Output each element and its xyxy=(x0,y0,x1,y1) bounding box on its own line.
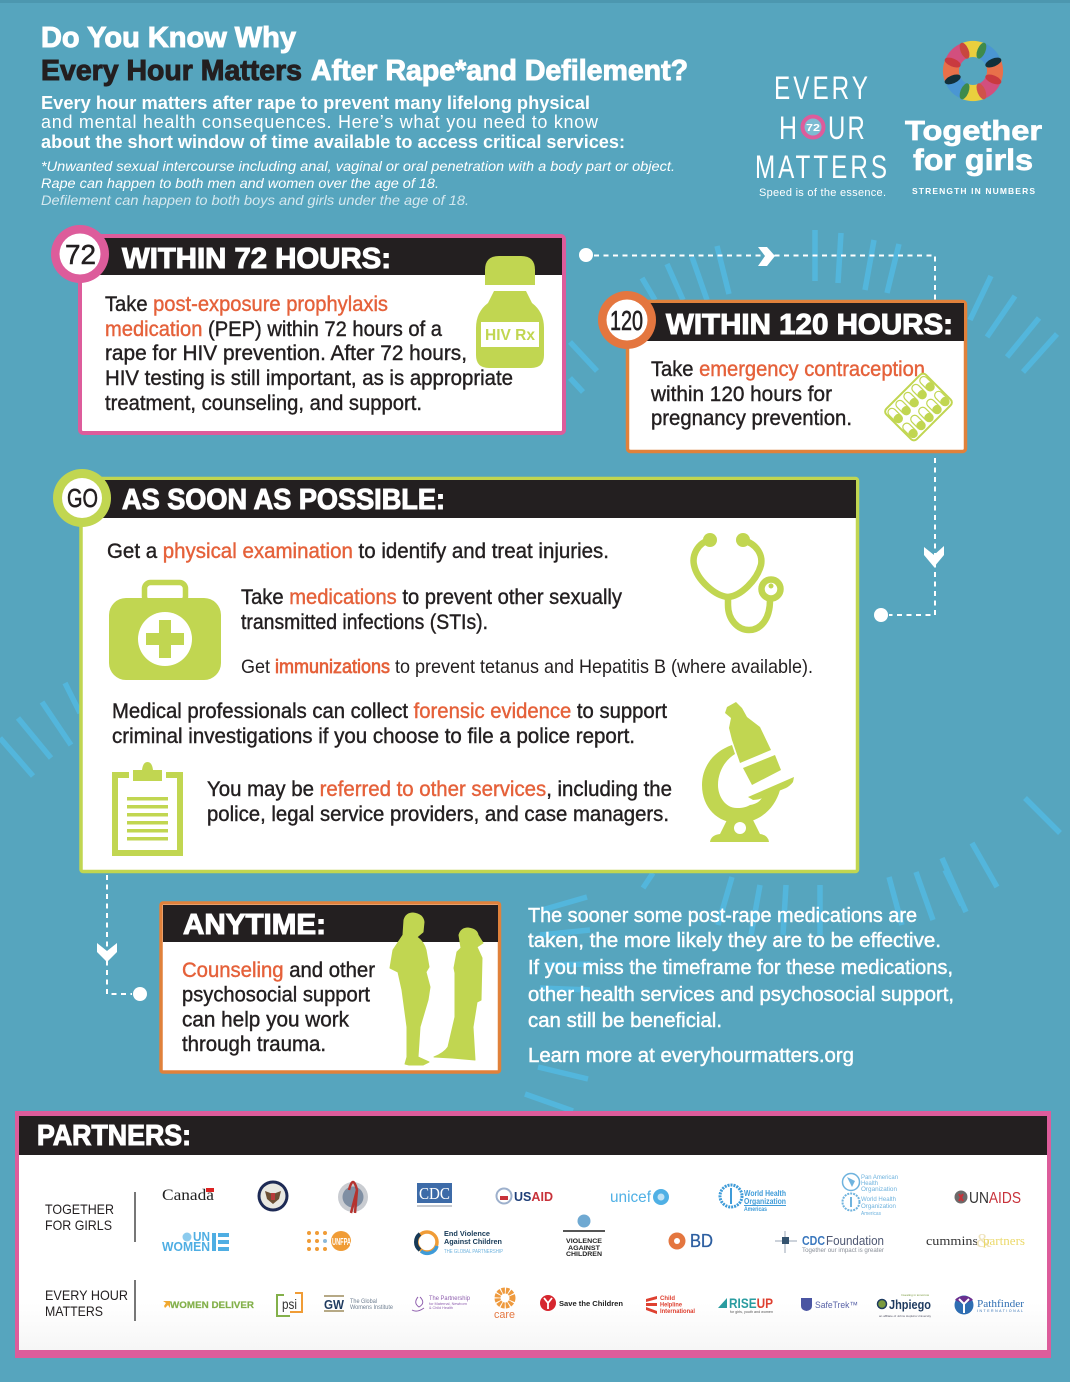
label: together for girls: TOGETHER xyxy=(45,1201,114,1217)
text: forensic evidence: Medical professionals can collect forensic evidence to support xyxy=(112,700,667,723)
footnote definitions xyxy=(41,158,675,208)
panel: as soon as possible xyxy=(53,469,858,872)
text: medications xyxy=(241,586,622,634)
logo: pepfar xyxy=(338,1182,368,1213)
logo: together for girls xyxy=(905,41,1042,196)
logo: usaid: USAID xyxy=(514,1189,553,1204)
logo: pathfinder international xyxy=(954,1296,1025,1314)
logo: pan american health organization: Organization xyxy=(861,1204,896,1210)
logo: every hour matters xyxy=(755,70,890,199)
logo: cdc foundation: CDC xyxy=(802,1234,825,1248)
body text: within 120 hours for xyxy=(650,383,832,406)
logo: child helpline international xyxy=(646,1295,695,1315)
body text: pregnancy prevention. xyxy=(651,407,852,430)
logo: unfpa: UNFPA xyxy=(332,1237,351,1248)
body text: rape for HIV prevention. After 72 hours, xyxy=(105,342,467,365)
logo: end violence against children: Against Children xyxy=(444,1237,502,1246)
text: sooner is better: The sooner some post-rape medications are xyxy=(528,905,917,927)
logo: end violence against children: End Violence xyxy=(444,1229,490,1238)
icon: first aid kit xyxy=(109,582,221,680)
logo: canada: Canada xyxy=(162,1187,214,1204)
logo: unaids: UNAIDS xyxy=(969,1190,1021,1207)
text: sooner is better: Learn more at everyhourmatters.org xyxy=(528,1045,854,1067)
logo: jhpiego: Jhpiego xyxy=(889,1297,931,1312)
icon: microscope xyxy=(702,702,794,842)
logo: every hour matters: MATTERS xyxy=(755,149,890,185)
logo: world health organization americas: Organization xyxy=(744,1197,786,1206)
heading: AS SOON AS POSSIBLE: xyxy=(122,484,445,516)
logo: rise up xyxy=(718,1295,773,1314)
logo: pan american health organization xyxy=(842,1174,898,1217)
logo: save the children: Save the Children xyxy=(559,1299,623,1308)
body text xyxy=(105,293,513,415)
footnote definitions: *Unwanted sexual intercourse including anal, vaginal or oral penetration with a body part or object. xyxy=(41,158,675,174)
logo: care: care xyxy=(494,1309,515,1321)
logo: safetrek xyxy=(801,1298,858,1311)
logo: the partnership: for Maternal, Newborn xyxy=(429,1301,467,1306)
intro text: and mental health consequences. Here’s what you need to know xyxy=(41,112,599,132)
logo: every hour matters: 72 xyxy=(806,123,821,134)
label: every hour matters xyxy=(45,1280,136,1321)
arrow: 120 hours to as soon as possible xyxy=(874,458,944,622)
logo: world health organization americas: Americas xyxy=(744,1207,768,1213)
logo: un violence against children: CHILDREN xyxy=(566,1251,602,1258)
logo: cummins and partners xyxy=(926,1230,1025,1252)
label: together for girls: FOR GIRLS xyxy=(45,1217,112,1233)
logo: child helpline international: Helpline xyxy=(660,1302,682,1308)
logo: un women: WOMEN xyxy=(162,1239,210,1254)
logo: jhpiego: an affiliate of Johns Hopkins University xyxy=(879,1314,931,1318)
body text: can help you work xyxy=(182,1008,349,1032)
icon: colour ring xyxy=(943,41,1003,101)
logo: the partnership xyxy=(412,1295,470,1311)
body text: Counseling and other xyxy=(182,959,375,982)
footnote definitions: Defilement can happen to both boys and girls under the age of 18. xyxy=(41,192,469,208)
logo: psi xyxy=(277,1293,302,1316)
text: immunizations: Get immunizations to prevent tetanus and Hepatitis B (where available). xyxy=(241,656,813,678)
logo: pathfinder international: Pathfinder xyxy=(977,1299,1025,1310)
badge: 72: 72 xyxy=(65,239,96,270)
logo: every hour matters: Speed is of the essence. xyxy=(759,187,886,199)
logo: cdc foundation xyxy=(775,1231,884,1254)
logo: world health organization americas xyxy=(720,1185,786,1213)
logo: save the children xyxy=(540,1295,623,1311)
logo: the partnership: & Child Health xyxy=(429,1305,453,1310)
text: forensic evidence xyxy=(112,700,667,748)
badge: go xyxy=(53,469,111,527)
logo: gw global womens institute: GW xyxy=(324,1297,345,1312)
logo: pan american health organization: Pan American xyxy=(861,1175,898,1181)
text: forensic evidence: criminal investigations if you choose to file a police report. xyxy=(112,725,635,748)
logo: cummins and partners: partners xyxy=(983,1233,1025,1248)
panel: within 72 hours xyxy=(51,225,564,433)
text: sooner is better: other health services and psychosocial support, xyxy=(528,984,954,1006)
logo: jhpiego: Investing in tomorrow xyxy=(901,1293,930,1297)
text: sooner is better: can still be beneficial. xyxy=(528,1010,722,1032)
logo: un violence against children: VIOLENCE xyxy=(566,1238,603,1245)
logo: pathfinder international: INTERNATIONAL xyxy=(977,1309,1023,1313)
text: physical examination: Get a physical examination to identify and treat injuries. xyxy=(107,540,609,563)
logo: pan american health organization: Health xyxy=(861,1181,878,1187)
logo: cdc foundation: Foundation xyxy=(826,1234,884,1248)
text: medications: Take medications to prevent other sexually xyxy=(241,586,622,609)
text: sooner is better: If you miss the timeframe for these medications, xyxy=(528,957,953,979)
icon: stethoscope xyxy=(694,533,780,630)
logo: un women: UN xyxy=(193,1229,210,1244)
logo: together for girls: Together xyxy=(905,115,1042,146)
logo: rise up: RISEUP xyxy=(729,1295,773,1311)
icon: clipboard xyxy=(115,762,180,853)
panel: anytime xyxy=(161,903,500,1072)
body text: treatment, counseling, and support. xyxy=(105,392,422,415)
title xyxy=(41,22,688,87)
logo: bd: BD xyxy=(690,1231,713,1251)
logo: gw global womens institute xyxy=(324,1295,394,1312)
badge: go: GO xyxy=(67,483,98,513)
body text: Take emergency contraception xyxy=(651,358,925,381)
intro text: about the short window of time available to access critical services: xyxy=(41,132,625,152)
logo: usaid xyxy=(496,1188,553,1204)
heading: WITHIN 72 HOURS: xyxy=(122,243,391,275)
text: medications: transmitted infections (STIs). xyxy=(241,611,488,634)
logo: gw global womens institute: Womens Institute xyxy=(350,1305,394,1311)
logo: every hour matters: UR xyxy=(828,110,867,146)
logo: together for girls: for girls xyxy=(913,144,1033,177)
label: together for girls xyxy=(45,1192,136,1242)
text: referred services xyxy=(207,778,672,826)
arrow: 72 hours to 120 hours xyxy=(579,247,935,300)
panel: within 120 hours xyxy=(598,291,966,452)
body text: medication (PEP) within 72 hours of a xyxy=(105,318,442,341)
heading: PARTNERS: xyxy=(37,1120,191,1152)
badge: 120 xyxy=(598,291,656,349)
icon: medicine bottle: HIV Rx xyxy=(485,327,535,344)
icon: medicine bottle xyxy=(476,256,544,368)
logo: pan american health organization: Organization xyxy=(861,1187,897,1193)
heading: WITHIN 120 HOURS: xyxy=(666,309,953,341)
logo: cdc: CDC xyxy=(419,1184,450,1203)
badge: 72 xyxy=(51,225,109,283)
logo: un women xyxy=(162,1229,229,1254)
logo: care xyxy=(494,1290,515,1321)
heading: ANYTIME: xyxy=(183,909,326,941)
badge: 120: 120 xyxy=(610,305,643,336)
logo: together for girls: STRENGTH IN NUMBERS xyxy=(912,186,1035,196)
title: After Rape*and Defilement? xyxy=(311,55,688,87)
logo: pan american health organization: World Health xyxy=(861,1197,896,1203)
logo: cdc foundation: Together our impact is greater xyxy=(802,1248,884,1254)
logo: cummins and partners: & xyxy=(976,1230,992,1252)
logo: psi: psi xyxy=(282,1296,297,1312)
body text: Take post-exposure prophylaxis xyxy=(105,293,388,316)
label: every hour matters: EVERY HOUR xyxy=(45,1287,128,1303)
logo: bd xyxy=(668,1231,713,1251)
text: referred services: police, legal service providers, and case managers. xyxy=(207,803,669,826)
icon: two people silhouettes xyxy=(390,913,483,1065)
icon: blister pack xyxy=(883,372,954,442)
logo: end violence against children: THE GLOBAL PARTNERSHIP xyxy=(444,1249,504,1255)
intro text xyxy=(41,93,625,152)
title: Do You Know Why xyxy=(41,22,296,54)
logo: safetrek: SafeTrek™ xyxy=(815,1300,858,1310)
logo: child helpline international: Child xyxy=(660,1295,675,1302)
text: referred services: You may be referred to other services, including the xyxy=(207,778,672,801)
footnote definitions: Rape can happen to both men and women over the age of 18. xyxy=(41,175,439,191)
logo: gw global womens institute: The Global xyxy=(350,1299,377,1305)
title: Every Hour Matters xyxy=(41,55,302,87)
intro text: Every hour matters after rape to prevent many lifelong physical xyxy=(41,93,590,113)
logo: end violence against children xyxy=(416,1229,504,1255)
body text: through trauma. xyxy=(182,1033,326,1056)
label: every hour matters: MATTERS xyxy=(45,1303,103,1319)
text: sooner is better xyxy=(528,905,954,1067)
logo: un violence against children: AGAINST xyxy=(568,1245,600,1252)
logo: child helpline international: International xyxy=(660,1308,695,1315)
logo: the partnership: The Partnership xyxy=(429,1295,470,1302)
logo: rise up: for girls, youth and women xyxy=(730,1310,773,1314)
logo: state department seal xyxy=(258,1180,288,1212)
panel: partners xyxy=(15,1111,1051,1358)
body text: psychosocial support xyxy=(182,984,370,1006)
logo: world health organization americas: World Health xyxy=(744,1189,786,1198)
logo: jhpiego xyxy=(878,1293,931,1318)
logo: un violence against children xyxy=(563,1214,605,1258)
logo: cummins and partners: cummins xyxy=(926,1233,978,1248)
body text xyxy=(650,358,925,430)
body text: HIV testing is still important, as is appropriate xyxy=(105,367,513,390)
logo: every hour matters: EVERY xyxy=(774,70,871,106)
logo: every hour matters: H xyxy=(779,110,797,146)
body text xyxy=(182,959,375,1056)
logo: unfpa xyxy=(307,1231,351,1251)
text: sooner is better: taken, the more likely they are to be effective. xyxy=(528,930,941,952)
logo: pan american health organization: Americas xyxy=(861,1211,881,1217)
arrow: as soon as possible to anytime xyxy=(97,875,147,1001)
logo: unicef: unicef xyxy=(610,1189,652,1206)
logo: women deliver: WOMEN DELIVER xyxy=(170,1300,254,1311)
